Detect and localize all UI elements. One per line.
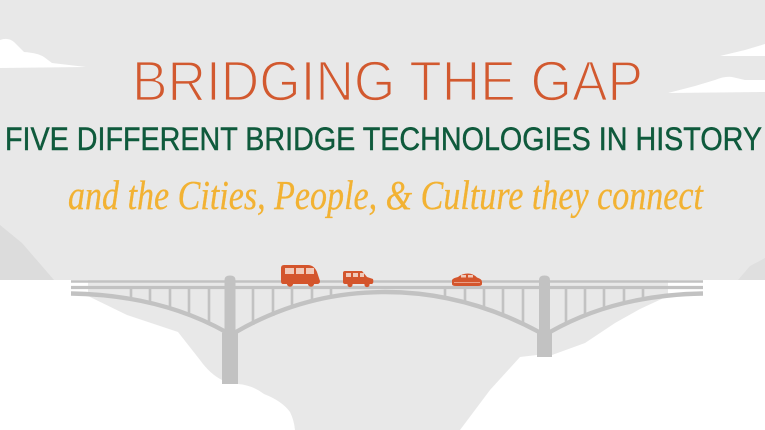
vehicle: car (452, 274, 482, 286)
cloud: lower right (668, 77, 765, 93)
right pillar (537, 276, 552, 357)
bridge hangers (131, 288, 643, 325)
cloud: upper right (720, 44, 765, 56)
cloud: upper left (0, 39, 86, 68)
vehicle: van (343, 271, 373, 287)
left pillar (222, 276, 238, 384)
bridge deck (71, 282, 703, 288)
canyon ground (88, 280, 668, 430)
sky background (0, 0, 765, 280)
left distant mountain (0, 225, 54, 280)
vehicle: bus (281, 265, 320, 287)
right distant mountain (738, 258, 765, 280)
title: BRIDGING THE GAP (132, 50, 643, 114)
arch bridge (71, 282, 703, 332)
bridge arches (71, 292, 703, 332)
